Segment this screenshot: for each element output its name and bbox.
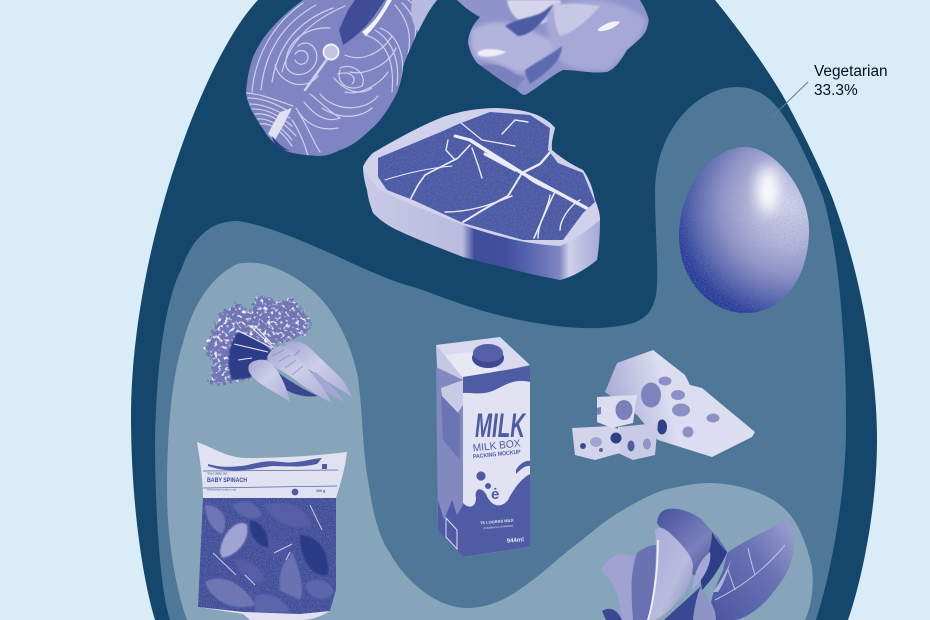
callout label: Vegetarian — [814, 63, 888, 80]
food: carrots with greens — [205, 295, 352, 403]
cheese cube: top — [597, 395, 637, 428]
carton label text: PACKING MOCKUP — [473, 450, 521, 460]
cheese cube: lower left — [572, 426, 622, 460]
lower mid leaves — [664, 587, 717, 620]
callout label: 33.3% — [814, 82, 858, 99]
cheese cube: lower right — [618, 423, 658, 460]
dark back leaf — [657, 509, 727, 578]
food: egg — [679, 147, 809, 313]
leader line — [771, 82, 808, 118]
food: milk carton: 944ml — [507, 537, 524, 545]
food: leafy greens — [602, 509, 793, 620]
food: beef steak — [363, 105, 605, 280]
left darker leaf — [631, 545, 656, 620]
food: swiss cheese — [572, 350, 755, 460]
food: milk carton: VITAMINAS A VITAMINAS — [483, 524, 514, 530]
carton top band — [463, 366, 530, 393]
callout: vegetarian share — [771, 63, 888, 118]
food: milk carton: TS LOGRAS MILK — [480, 518, 514, 525]
food: bagged baby spinach: BABY SPINACH — [207, 478, 247, 484]
inner panel: vegan — [167, 263, 813, 620]
left stalk — [602, 554, 634, 620]
carton label text: ė — [491, 486, 499, 503]
food: chicken pieces — [457, 0, 649, 95]
carton label text: MILK BOX — [472, 438, 521, 454]
front light leaf — [648, 528, 693, 620]
carrot greens — [205, 295, 310, 384]
right leaf — [710, 520, 793, 620]
food: bagged baby spinach: Washed and ready to eat — [207, 488, 236, 492]
carrot shadow — [272, 368, 318, 397]
middle panel: vegetarian — [155, 87, 846, 620]
carton label text: MILK — [475, 407, 526, 445]
carrot greens dark core — [229, 333, 272, 380]
bag label text: Your daily cut — [207, 472, 227, 476]
carton label text — [472, 407, 526, 503]
food: milk carton — [436, 337, 530, 557]
food: bagged baby spinach: 200 g — [316, 489, 325, 493]
food: bagged baby spinach — [197, 442, 347, 620]
food: salmon steak — [246, 0, 437, 156]
carton bottom splash — [463, 474, 530, 557]
carton cap — [472, 344, 504, 368]
